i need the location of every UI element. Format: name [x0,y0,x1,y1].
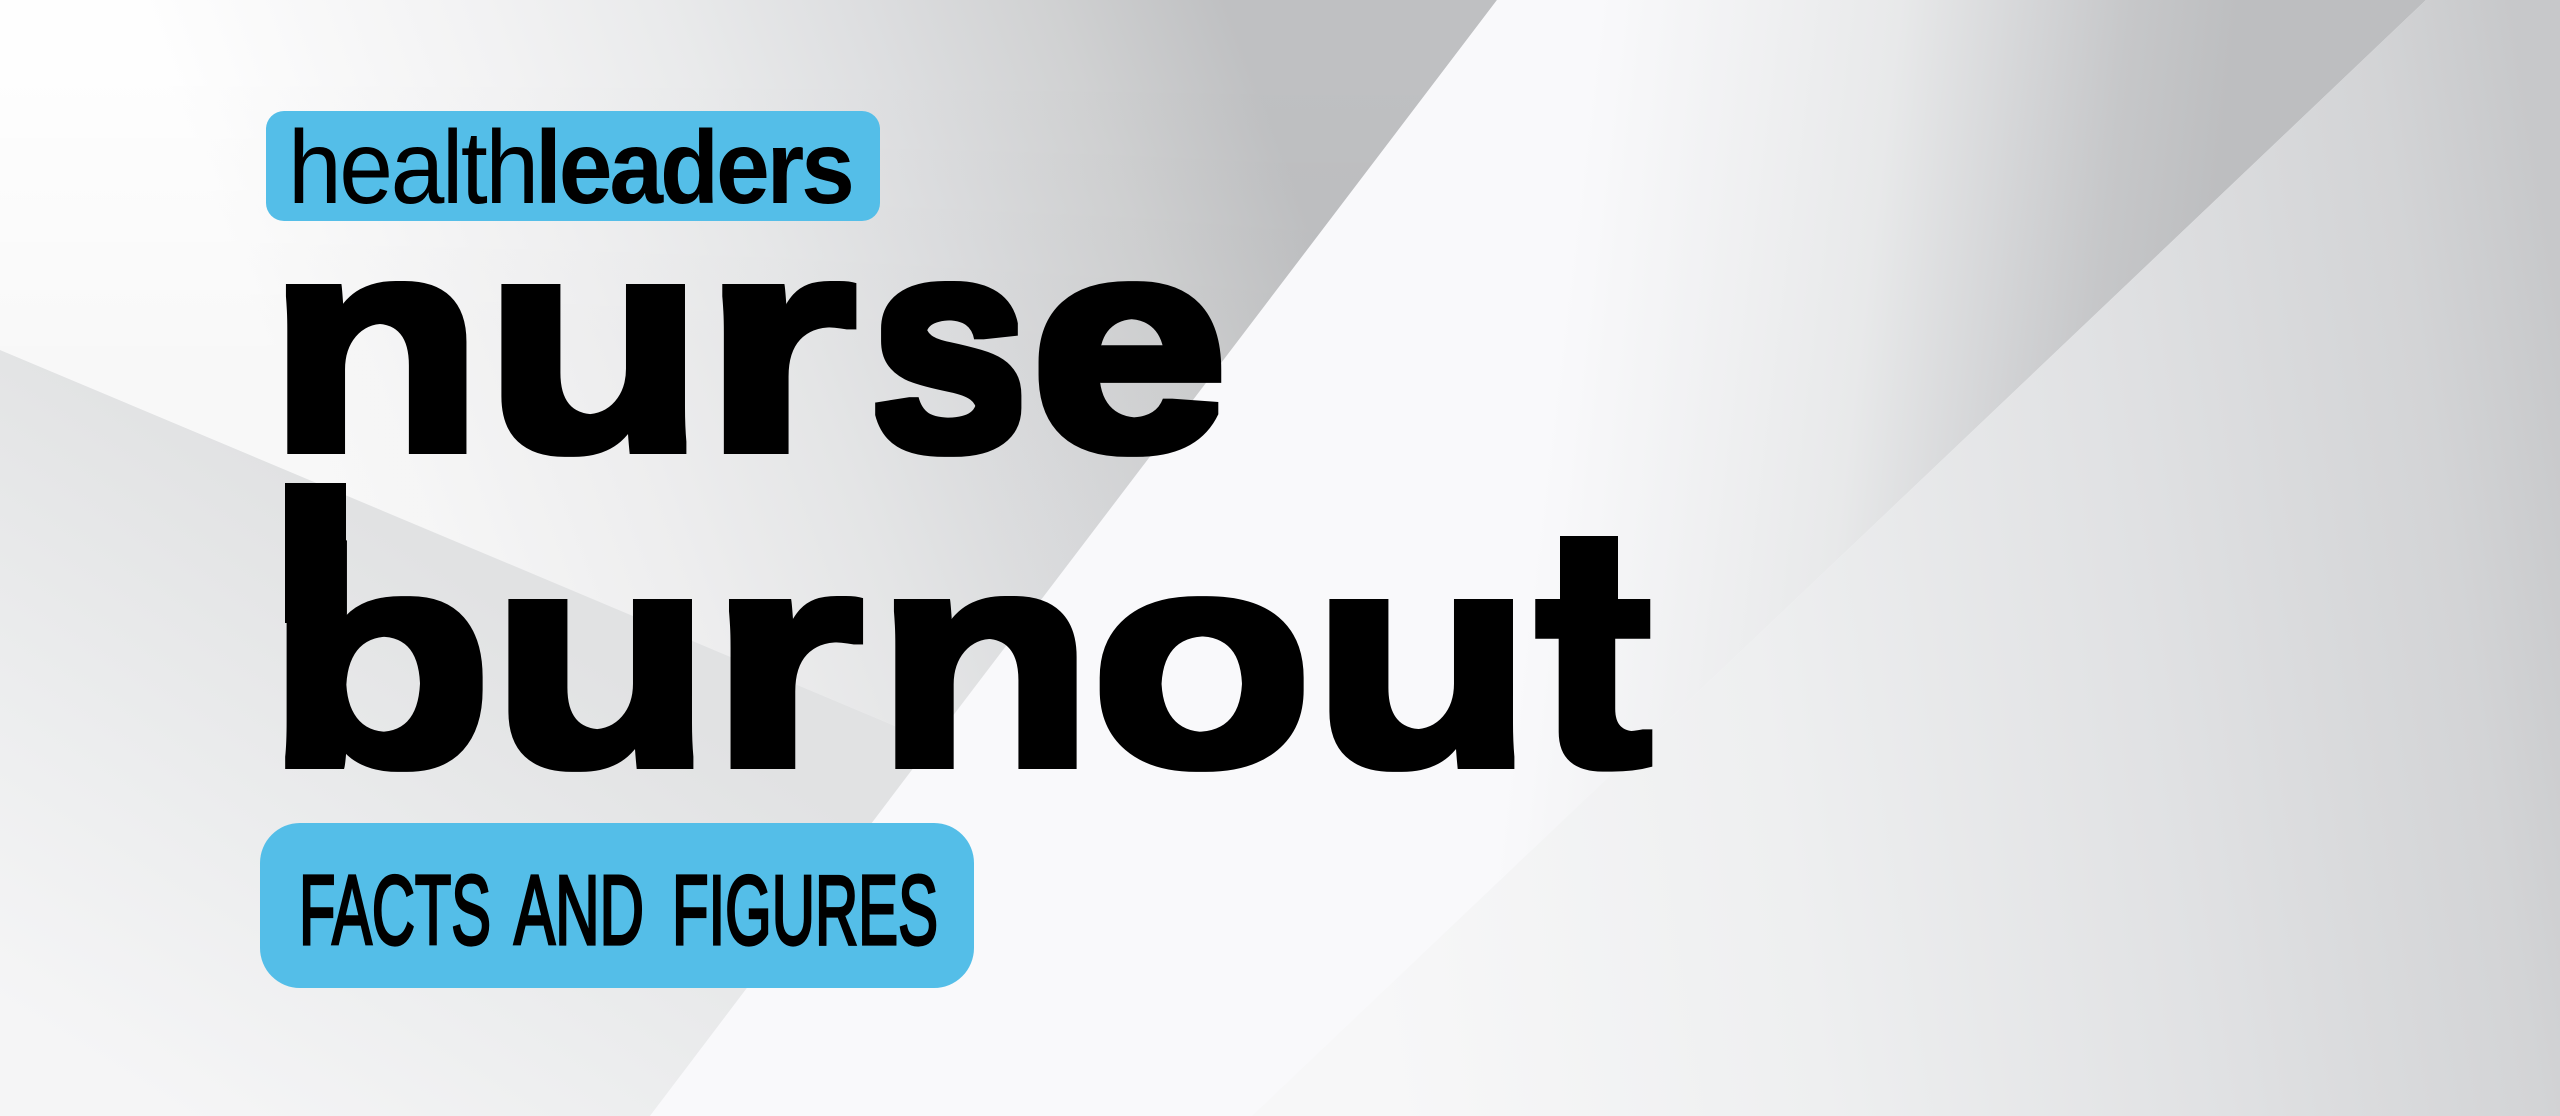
subtitle text: FIGURES [672,855,938,965]
title line: nurse: r [700,177,858,512]
subtitle text: AND [514,855,644,965]
title: nurse burnout [265,177,1652,827]
title line: nurse [267,177,1229,512]
title line: burnout: b [265,492,493,827]
title line: nurse: n [267,178,484,512]
title line: burnout: t [1536,492,1652,826]
title line: nurse: u [483,177,706,512]
title line: nurse: e [1029,179,1229,512]
logo wordmark: leaders [535,110,855,226]
title line: burnout [265,483,1652,827]
logo badge [266,110,880,226]
logo wordmark: health [288,110,539,226]
title line: nurse: s [870,178,1029,512]
title line: burnout: u [490,492,713,827]
subtitle badge [260,823,974,988]
title line: burnout: r [707,492,865,827]
title line: burnout: n [875,494,1094,827]
title line: burnout: o [1090,492,1313,827]
title line: burnout: u [1311,492,1534,827]
subtitle text [299,855,938,965]
subtitle text: FACTS [299,855,491,965]
